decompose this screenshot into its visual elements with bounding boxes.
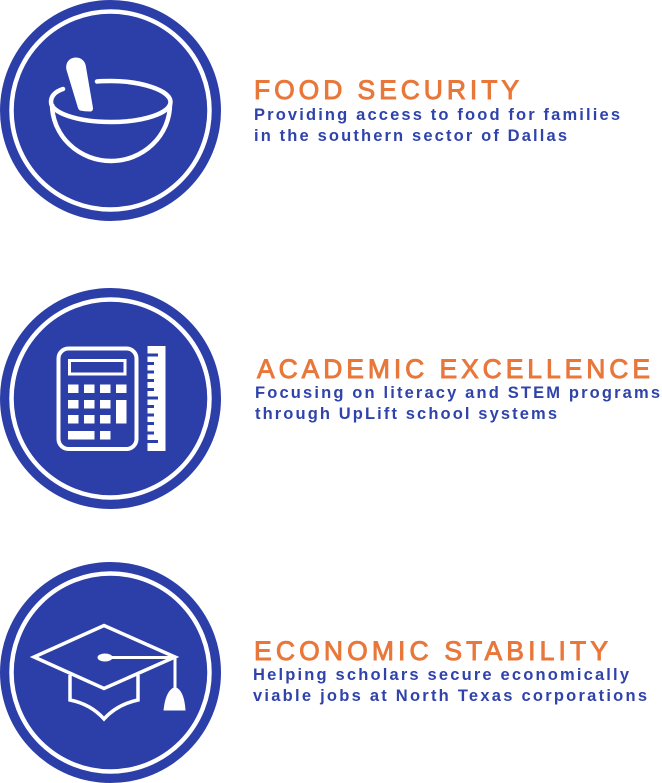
text: academic excellence description: Focusing on literacy and STEM programs bbox=[255, 384, 660, 402]
icon: mortar and pestle badge bbox=[0, 0, 221, 221]
icon: graduation cap badge bbox=[0, 562, 221, 783]
heading: food security: FOOD SECURITY bbox=[254, 75, 519, 105]
text: economic stability description: Helping scholars secure economically bbox=[253, 666, 630, 684]
heading: academic excellence: ACADEMIC EXCELLENCE bbox=[257, 354, 650, 384]
icon: calculator and ruler badge bbox=[0, 288, 221, 509]
panel: food security bbox=[0, 0, 627, 221]
text: food security description: in the southern sector of Dallas bbox=[254, 127, 567, 145]
text: food security description: Providing access to food for families bbox=[254, 106, 620, 124]
text: academic excellence description: through UpLift school systems bbox=[255, 405, 557, 423]
heading: economic stability: ECONOMIC STABILITY bbox=[254, 636, 608, 666]
panel: economic stability bbox=[0, 562, 647, 783]
panel: academic excellence bbox=[0, 288, 662, 509]
text: economic stability description: viable jobs at North Texas corporations bbox=[253, 687, 647, 705]
